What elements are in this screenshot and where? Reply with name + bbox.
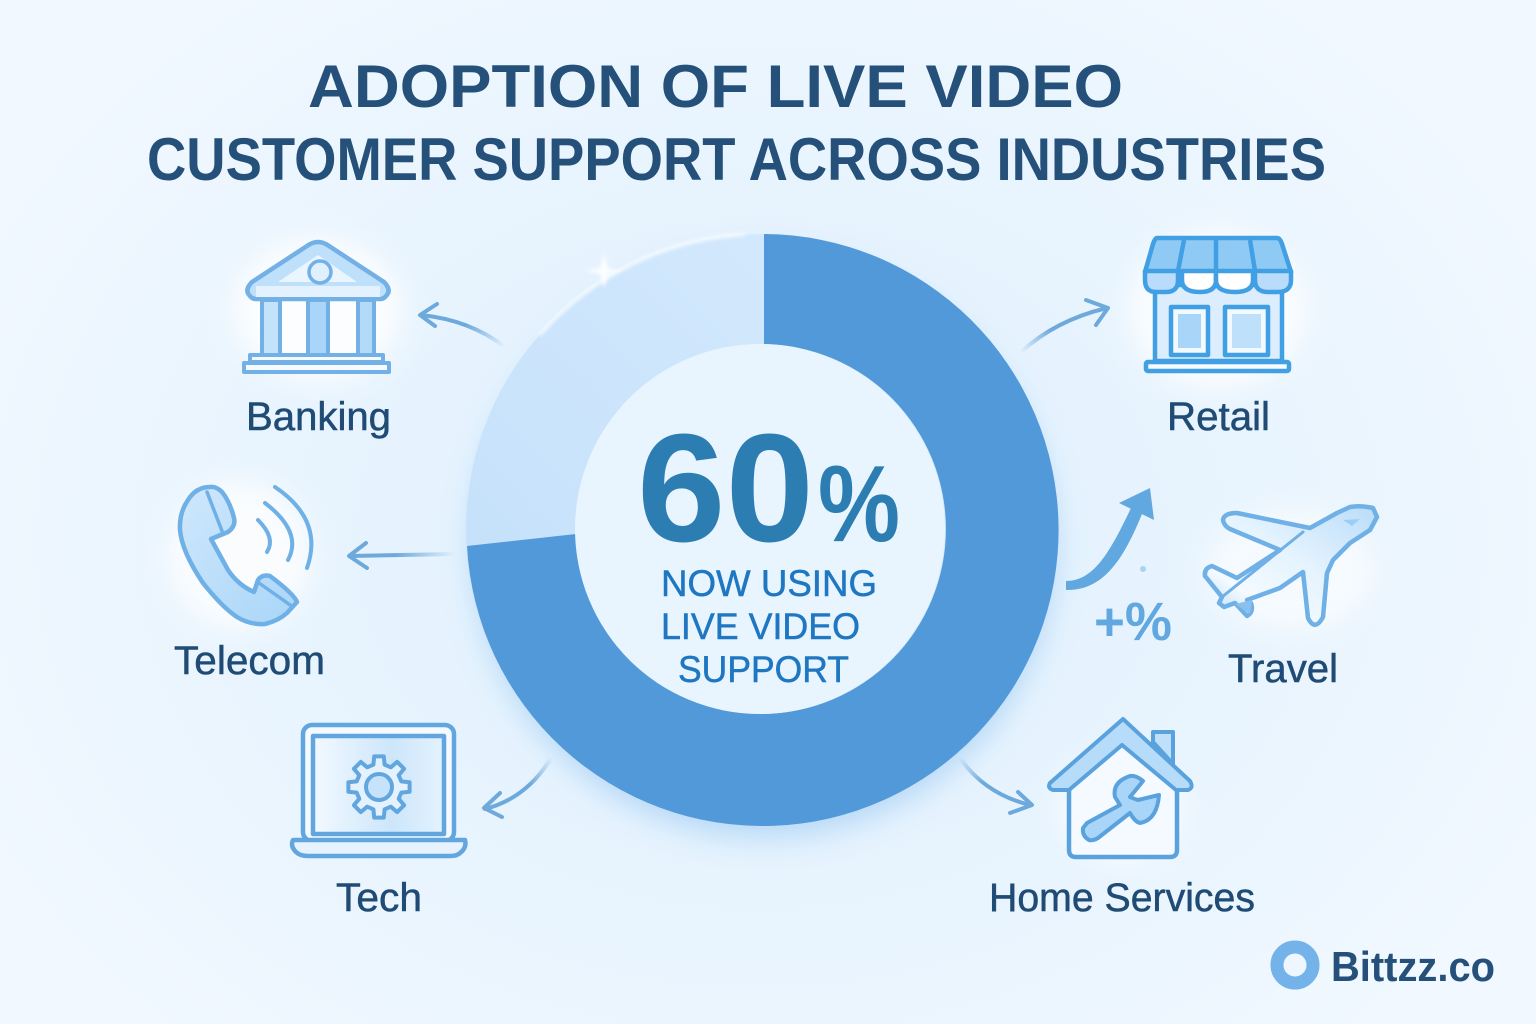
title: ADOPTION OF LIVE VIDEO	[308, 53, 1123, 120]
icon: house with wrench	[1049, 719, 1192, 860]
arrow: to home services	[960, 758, 1032, 813]
icon: store	[1127, 230, 1307, 390]
center statistic: NOW USING	[661, 563, 877, 604]
label: Home Services: Home Services	[989, 876, 1255, 920]
label: Telecom: Telecom	[174, 639, 325, 683]
logo: Bittzz.co: Bittzz.co	[1331, 943, 1495, 990]
icon: bank	[233, 238, 403, 382]
arrow: to tech	[484, 758, 551, 817]
center statistic: 60	[637, 402, 814, 574]
arrow: growth	[1066, 488, 1154, 590]
arrow: to banking	[420, 304, 505, 347]
label: Tech: Tech	[336, 876, 422, 920]
label: Banking: Banking	[246, 395, 391, 439]
icon: airplane	[1205, 506, 1377, 632]
center statistic: SUPPORT	[678, 649, 849, 690]
title: CUSTOMER SUPPORT ACROSS INDUSTRIES	[147, 126, 1326, 193]
gear	[348, 756, 410, 818]
arrow: to retail	[1021, 300, 1108, 352]
center statistic: LIVE VIDEO	[661, 606, 860, 647]
plus percent symbol	[1094, 566, 1172, 652]
center statistic: %	[818, 443, 900, 565]
center statistic	[637, 402, 900, 690]
arrow: to telecom	[349, 543, 455, 568]
label: Travel: Travel	[1228, 647, 1338, 691]
donut center	[575, 344, 945, 714]
icon: telephone	[168, 480, 312, 630]
label: Retail: Retail	[1167, 395, 1270, 439]
title	[147, 53, 1326, 193]
plus percent symbol: +%	[1094, 592, 1172, 652]
icon: laptop	[292, 725, 465, 856]
donut chart	[466, 234, 1059, 836]
